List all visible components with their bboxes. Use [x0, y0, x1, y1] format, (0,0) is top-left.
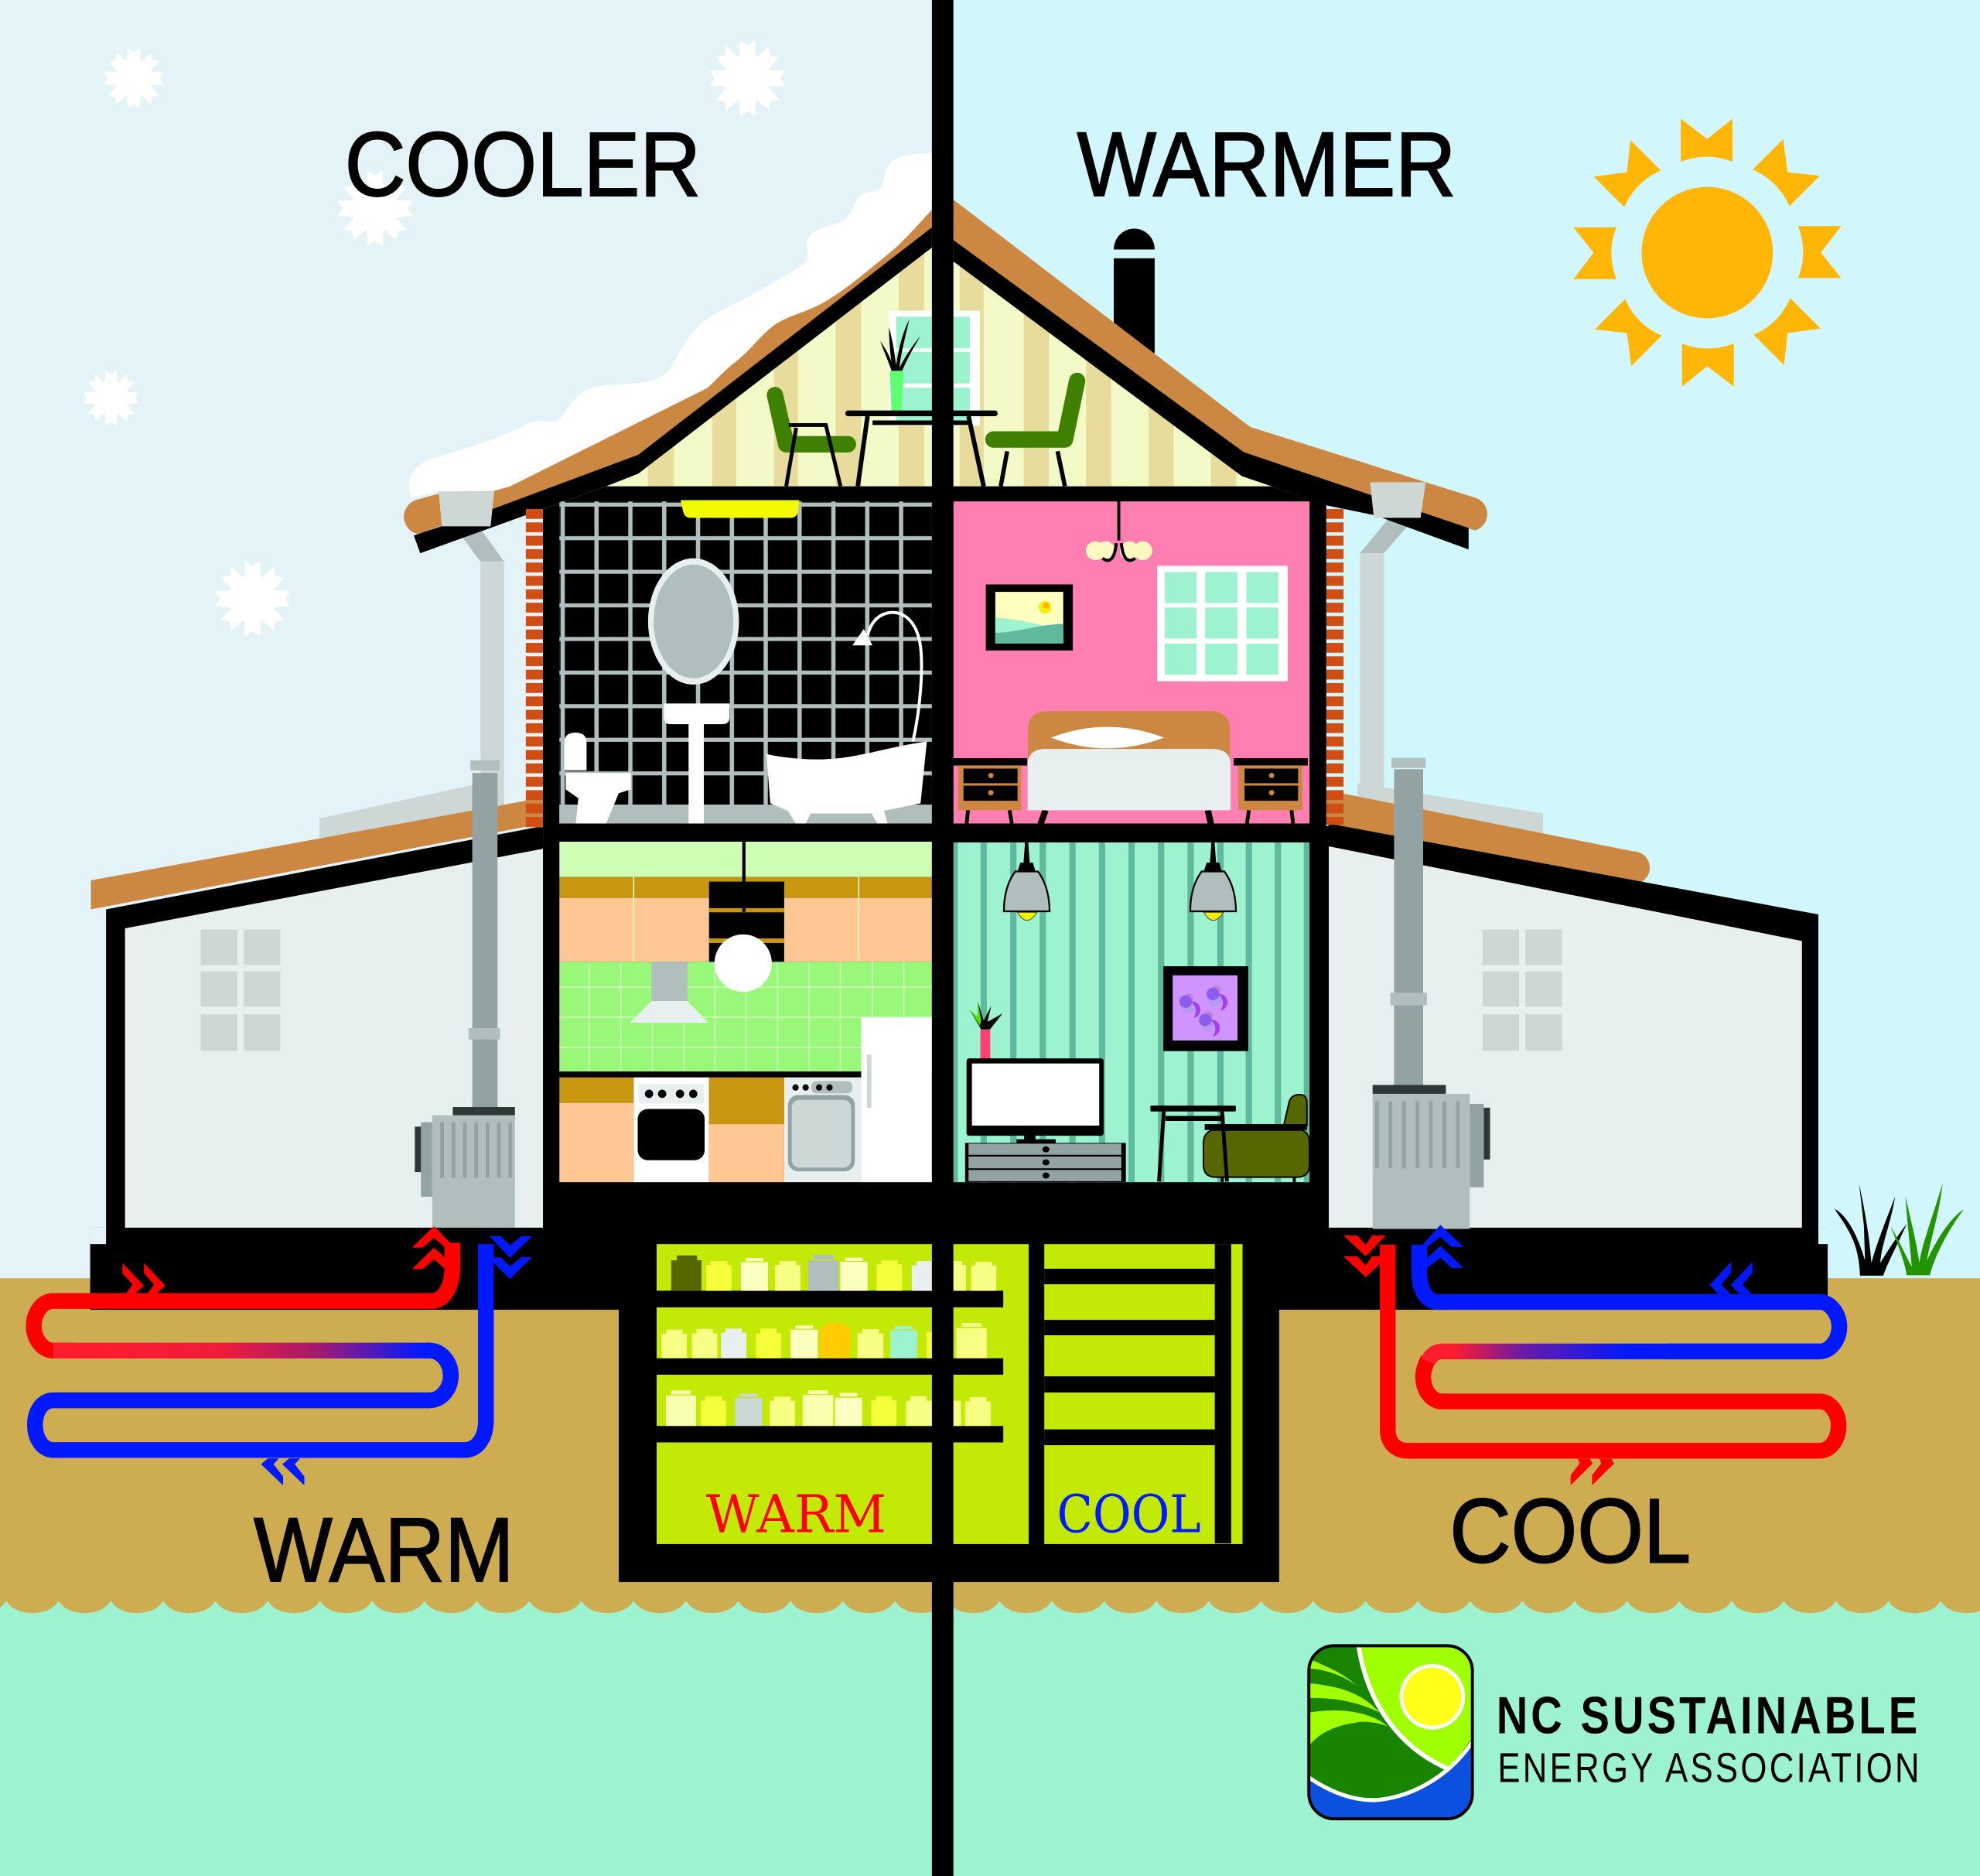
- heat pump right: [1373, 1085, 1490, 1229]
- center divider: [932, 0, 954, 1876]
- attic window: [889, 311, 980, 425]
- pendant lamp right: [1190, 841, 1236, 921]
- nightstand left: [954, 758, 1027, 823]
- snowflakes: [84, 40, 786, 637]
- grass tufts: [1835, 1184, 1964, 1276]
- television: [967, 1058, 1104, 1143]
- heat pump left: [415, 1107, 515, 1228]
- left wing roof: [91, 798, 543, 910]
- range hood: [630, 962, 708, 1023]
- media cabinet: [965, 1143, 1126, 1182]
- jars: top shelf: [671, 1255, 996, 1291]
- attic vase and plant: [880, 320, 920, 412]
- basement: [619, 1244, 1279, 1582]
- arrows left, flow up: [412, 1226, 451, 1269]
- living room plant: [970, 1002, 1002, 1058]
- house frame: [543, 487, 1329, 1244]
- left roof orange: [404, 210, 932, 535]
- pendant light and upper cabinet: [709, 841, 784, 992]
- logo: NC Sustainable Energy Association: [1301, 1639, 1922, 1826]
- right wing window: [1483, 930, 1562, 1051]
- left wing window: [201, 930, 280, 1051]
- sink: [664, 703, 729, 823]
- label: warm ground: WARM: [254, 1499, 514, 1601]
- icon: sun: [1573, 118, 1841, 387]
- jars: middle shelf: [662, 1323, 987, 1358]
- lower roof band right: [1357, 783, 1543, 834]
- oven: [633, 1078, 709, 1182]
- kitchen: [559, 841, 932, 1182]
- arrows right, flow left: [1710, 1262, 1753, 1293]
- bathroom: [559, 501, 932, 823]
- arrows left, flow down: [490, 1236, 532, 1279]
- left flue pipe: [469, 760, 500, 1109]
- armchair: [1203, 1095, 1309, 1182]
- right wing roof: [1329, 791, 1650, 884]
- heading: warmer: WARMER: [1077, 114, 1456, 215]
- bathtub: [766, 613, 927, 823]
- dishwasher: [784, 1078, 861, 1182]
- left brick wall: [526, 509, 543, 827]
- lower roof snow band left: [319, 783, 481, 841]
- arrows right, flow right: [1571, 1459, 1614, 1485]
- right flue pipe: [1391, 758, 1427, 1088]
- attic right: [954, 253, 1275, 489]
- left downspout: [453, 525, 504, 805]
- chandelier: [1086, 501, 1152, 560]
- arrows right, flow up: [1421, 1225, 1463, 1268]
- sky: cold side: [0, 0, 940, 1288]
- ground loop right: [1388, 1245, 1839, 1451]
- attic chair right: [993, 381, 1077, 487]
- label: cool: COOL: [1057, 1484, 1201, 1544]
- ceiling light: [681, 501, 799, 518]
- ground: [0, 1278, 1980, 1615]
- heading: cooler: COOLER: [345, 114, 701, 215]
- picture: purple flowers: [1163, 966, 1248, 1051]
- arrows left, flow right: [122, 1263, 166, 1293]
- picture: landscape: [986, 584, 1073, 651]
- left roof rafter: [414, 227, 932, 553]
- pendant lamp left: [1004, 841, 1050, 921]
- right roof rafter: [954, 240, 1469, 549]
- arrows left, flow left: [261, 1458, 304, 1485]
- left wing room: [106, 826, 543, 1244]
- groundwater: [0, 1598, 1980, 1876]
- foundation plinth: [90, 1228, 1828, 1310]
- bedroom window: [1157, 566, 1288, 682]
- pantry shelves: [657, 1290, 1003, 1442]
- label: warm: WARM: [706, 1484, 886, 1544]
- right wing room: [1329, 823, 1818, 1244]
- attic chair left: [775, 395, 848, 487]
- side table: [1150, 1105, 1236, 1181]
- right roof orange: [954, 200, 1487, 531]
- counter and base cabinets: [559, 1071, 861, 1182]
- sky: warm side: [940, 0, 1980, 1288]
- left gutter: [439, 491, 494, 526]
- attic left: [593, 240, 934, 489]
- logo icon: [1307, 1644, 1474, 1820]
- attic table: [845, 411, 998, 487]
- ground loop left: [34, 1243, 486, 1450]
- arrows right, flow down: [1343, 1235, 1386, 1277]
- snow on roof: [409, 152, 932, 498]
- refrigerator: [861, 1017, 932, 1182]
- label: cool ground: COOL: [1449, 1481, 1691, 1582]
- mirror: [648, 559, 739, 685]
- nightstand right: [1234, 758, 1308, 823]
- bed: [1028, 711, 1231, 824]
- toilet: [565, 733, 631, 823]
- right downspout: [1360, 518, 1408, 796]
- right gutter: [1370, 482, 1425, 518]
- bedroom: [954, 501, 1309, 824]
- living room: [954, 841, 1309, 1182]
- basement stairs: [1044, 1244, 1231, 1543]
- jars: bottom shelf: [666, 1390, 991, 1426]
- right brick wall: [1326, 507, 1343, 825]
- chimney: [1114, 229, 1155, 353]
